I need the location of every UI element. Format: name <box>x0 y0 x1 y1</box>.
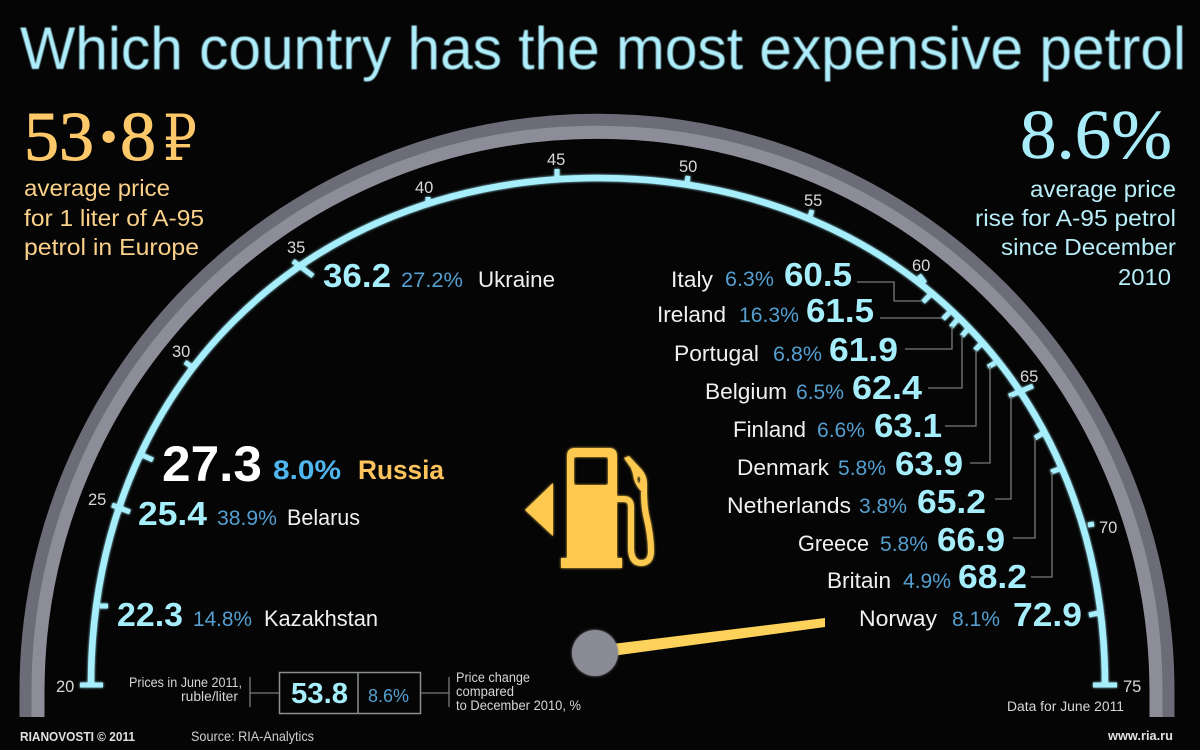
row: Norway <box>859 596 1082 633</box>
row: Finland: 6.6% <box>817 419 865 442</box>
row: Finland: 63.1 <box>874 407 942 444</box>
legend box: 53.8 <box>291 678 348 710</box>
source: Source: RIA-Analytics <box>191 728 314 744</box>
row: Kazakhstan <box>117 596 378 633</box>
row: Russia: Russia <box>358 455 445 485</box>
big percentage: 8.6% <box>1020 97 1172 174</box>
scale labels: 75 <box>1123 678 1141 696</box>
row: Belgium: Belgium <box>705 379 787 404</box>
scale labels: 20 <box>56 678 74 696</box>
row: Netherlands: 65.2 <box>917 483 986 520</box>
rise description: 2010 <box>1118 264 1171 290</box>
row: Greece: 5.8% <box>880 533 928 556</box>
legend right caption <box>456 670 581 713</box>
rise description: since December <box>1001 234 1176 260</box>
row: Finland <box>733 407 942 444</box>
legend box <box>280 672 420 714</box>
big price: 53 <box>24 99 94 176</box>
row: Italy: Italy <box>671 267 713 292</box>
scale labels: 70 <box>1099 519 1117 537</box>
row: Greece: 66.9 <box>937 521 1005 558</box>
legend left caption <box>129 675 242 704</box>
scale labels <box>56 151 1141 696</box>
row: Russia: 27.3 <box>162 436 262 492</box>
panel: average price rise <box>975 97 1176 290</box>
row: Netherlands <box>727 483 986 520</box>
price description: petrol in Europe <box>24 234 199 260</box>
row: Kazakhstan: 22.3 <box>117 596 183 633</box>
legend left caption: ruble/liter <box>181 689 239 704</box>
row: Belarus: 38.9% <box>217 507 277 530</box>
big price: ₽ <box>163 102 197 176</box>
row: Denmark: 63.9 <box>895 445 963 482</box>
row: Ireland: 61.5 <box>806 292 874 329</box>
needle arm <box>612 618 825 656</box>
legend right caption: Price change <box>456 670 530 685</box>
row: Norway: 8.1% <box>952 608 1000 631</box>
row: Ireland <box>657 292 874 329</box>
row: Ukraine: 27.2% <box>401 269 463 292</box>
row: Netherlands: Netherlands <box>727 493 851 518</box>
legend box: 8.6% <box>368 686 409 706</box>
legend right caption: compared <box>456 684 514 699</box>
legend right caption: to December 2010, % <box>456 698 581 713</box>
row: Norway: Norway <box>859 606 937 631</box>
row: Britain: 68.2 <box>958 558 1027 595</box>
needle hub <box>572 630 618 676</box>
row: Portugal <box>674 331 898 368</box>
price description <box>24 175 204 260</box>
row: Italy: 6.3% <box>725 268 774 291</box>
rise description: rise for A-95 petrol <box>975 205 1176 231</box>
gauge scale arc with ticks <box>80 169 1117 685</box>
scale labels: 40 <box>415 179 433 197</box>
row: Denmark <box>737 445 963 482</box>
row: Portugal: 61.9 <box>829 331 898 368</box>
website: www.ria.ru <box>1107 728 1173 743</box>
big price <box>24 99 197 176</box>
row: Greece: Greece <box>798 531 869 556</box>
row: Greece <box>798 521 1005 558</box>
big price: · <box>97 99 120 176</box>
row: Norway: 72.9 <box>1013 596 1082 633</box>
row: Kazakhstan: 14.8% <box>193 608 252 631</box>
scale labels: 45 <box>547 151 565 169</box>
row: Ukraine: Ukraine <box>478 267 555 292</box>
scale labels: 25 <box>88 491 106 509</box>
hose <box>617 492 651 563</box>
gauge outer grey rim <box>32 126 1162 717</box>
legend left caption: Prices in June 2011, <box>129 675 242 690</box>
row: Belgium: 62.4 <box>852 369 923 406</box>
footer credit: RIANOVOSTI © 2011 <box>20 729 135 744</box>
row: Italy <box>671 256 852 293</box>
row: Italy: 60.5 <box>784 256 852 293</box>
row: Ireland: 16.3% <box>739 304 799 327</box>
data date note: Data for June 2011 <box>1007 699 1124 714</box>
row: Portugal: 6.8% <box>773 343 822 366</box>
row: Portugal: Portugal <box>674 341 759 366</box>
row: Russia: 8.0% <box>273 455 341 485</box>
scale labels: 55 <box>804 192 822 210</box>
row: Netherlands: 3.8% <box>859 495 907 518</box>
rise description <box>975 176 1176 290</box>
pump body <box>561 448 622 568</box>
scale labels: 50 <box>679 158 697 176</box>
row: Belgium <box>705 369 923 406</box>
row: Britain: 4.9% <box>903 570 951 593</box>
arrow <box>525 483 553 536</box>
row: Russia <box>162 436 445 492</box>
row: Denmark: 5.8% <box>838 457 886 480</box>
row: Britain <box>827 558 1027 595</box>
row: Belarus <box>138 495 360 532</box>
scale labels: 60 <box>912 257 930 275</box>
panel: average price in Europe <box>24 99 204 260</box>
row: Denmark: Denmark <box>737 455 830 480</box>
row: Finland: Finland <box>733 417 806 442</box>
row: Belgium: 6.5% <box>796 381 844 404</box>
icon: fuel pump with side arrow <box>525 448 651 568</box>
rise description: average price <box>1030 176 1176 202</box>
row: Britain: Britain <box>827 568 891 593</box>
title: Which country has the most expensive petrol <box>20 15 1186 82</box>
leader lines <box>857 282 1052 577</box>
price description: average price <box>24 175 170 201</box>
row: Kazakhstan: Kazakhstan <box>264 606 378 631</box>
legend <box>129 670 581 714</box>
gauge needle <box>572 618 825 676</box>
row: Belarus: Belarus <box>287 505 360 530</box>
price description: for 1 liter of A-95 <box>24 205 204 231</box>
nozzle <box>624 456 647 496</box>
scale labels: 65 <box>1020 368 1038 386</box>
row: Ireland: Ireland <box>657 302 726 327</box>
scale labels: 35 <box>287 239 305 257</box>
big price: 8 <box>120 99 156 176</box>
scale labels: 30 <box>172 343 190 361</box>
row: Ukraine: 36.2 <box>323 257 391 294</box>
row: Belarus: 25.4 <box>138 495 208 532</box>
row: Ukraine <box>323 257 555 294</box>
